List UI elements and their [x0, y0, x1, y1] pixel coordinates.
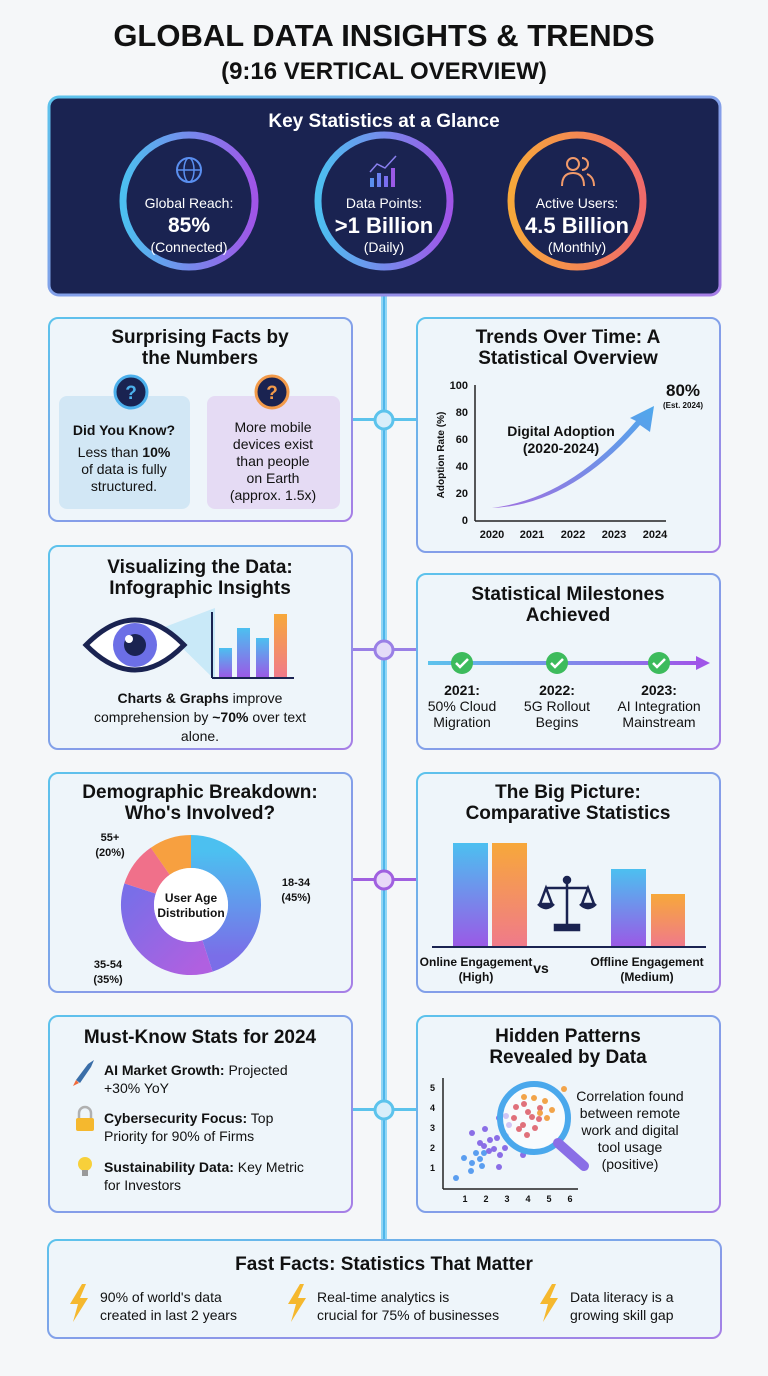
line chart: digital adoption: (Est. 2024): [663, 401, 703, 410]
fact 2: [288, 1284, 499, 1323]
scatter plot: 1: [462, 1194, 468, 1204]
stat: data points: (Daily): [364, 239, 404, 255]
panel: surprising facts: the Numbers: [142, 348, 258, 369]
line chart: digital adoption: 20: [456, 488, 468, 500]
panel: visualizing the data: Visualizing the Data:: [107, 557, 293, 578]
fact 3: [540, 1284, 674, 1323]
panel: trends over time: Statistical Overview: [478, 348, 658, 369]
panel: comparative statistics: Offline Engagement: [590, 955, 704, 969]
stat: active users: (Monthly): [548, 239, 606, 255]
panel: milestones: Achieved: [526, 605, 610, 626]
fact card: mobile devices: [207, 376, 340, 509]
panel: comparative statistics: The Big Picture:: [495, 782, 641, 803]
panel: surprising facts: [49, 318, 352, 521]
line chart: digital adoption: 0: [462, 515, 468, 527]
panel: hidden patterns: tool usage: [598, 1139, 663, 1155]
fact card: mobile devices: on Earth: [247, 470, 299, 486]
scatter plot: 3: [504, 1194, 510, 1204]
scatter plot: 5: [546, 1194, 552, 1204]
stat: global reach: (Connected): [150, 239, 228, 255]
panel: milestones: 2023:: [641, 682, 677, 698]
panel: key statistics: [49, 97, 720, 295]
panel: comparative statistics: Online Engagement: [420, 955, 532, 969]
item: cybersecurity: Priority for 90% of Firms: [104, 1128, 254, 1144]
panel: milestones: Begins: [536, 714, 578, 730]
panel: milestones: 2022:: [539, 682, 575, 698]
scatter plot: 4: [525, 1194, 531, 1204]
panel: hidden patterns: (positive): [602, 1156, 658, 1172]
panel: hidden patterns: Revealed by Data: [489, 1047, 647, 1068]
panel: milestones: 2021:: [444, 682, 480, 698]
fact card: did you know: structured.: [91, 478, 157, 494]
line chart: digital adoption: 80%: [666, 381, 700, 400]
panel: fast facts: [48, 1240, 721, 1338]
title: [113, 18, 655, 85]
line chart: digital adoption: 100: [450, 380, 468, 392]
stat: data points: Data Points:: [346, 195, 422, 211]
panel: comparative statistics: [417, 773, 720, 992]
panel: hidden patterns: Hidden Patterns: [495, 1026, 641, 1047]
panel: demographic breakdown: 35-54: [94, 959, 123, 971]
central timeline spine: [352, 290, 416, 1245]
panel: visualizing the data: Charts & Graphs improve: [118, 690, 283, 706]
line chart: digital adoption: Adoption Rate (%): [436, 412, 447, 498]
panel: visualizing the data: alone.: [181, 728, 219, 744]
scatter plot: 4: [430, 1103, 435, 1113]
line chart: digital adoption: 60: [456, 434, 468, 446]
fact card: mobile devices: (approx. 1.5x): [230, 487, 316, 503]
scatter plot: 1: [430, 1163, 435, 1173]
scatter plot: 3: [430, 1123, 435, 1133]
panel: visualizing the data: [49, 546, 352, 749]
stat: data points: [318, 135, 450, 267]
panel: demographic breakdown: (20%): [95, 847, 125, 859]
item: cybersecurity: [76, 1107, 274, 1144]
fact card: did you know: Did You Know?: [73, 422, 175, 438]
fact 2: Real-time analytics is: [317, 1289, 449, 1305]
panel: milestones: [417, 574, 720, 749]
line chart: digital adoption: 2023: [602, 529, 626, 541]
stat: data points: >1 Billion: [335, 213, 433, 238]
fact card: did you know: [59, 376, 190, 509]
panel: demographic breakdown: Who's Involved?: [125, 803, 275, 824]
line chart: digital adoption: 40: [456, 461, 468, 473]
panel: surprising facts: Surprising Facts by: [111, 327, 289, 348]
panel: hidden patterns: between remote: [580, 1105, 680, 1121]
fact card: did you know: Less than 10%: [78, 444, 171, 460]
bar chart: mini: [212, 612, 294, 678]
donut chart: user age: Distribution: [157, 906, 225, 920]
fact card: mobile devices: ?: [266, 383, 278, 404]
line chart: digital adoption: 2024: [643, 529, 668, 541]
scatter plot: 6: [567, 1194, 573, 1204]
line chart: digital adoption: (2020-2024): [523, 440, 599, 456]
panel: demographic breakdown: 18-34: [282, 877, 311, 889]
panel: comparative statistics: vs: [533, 960, 549, 976]
fact card: did you know: ?: [125, 383, 137, 404]
fact 2: crucial for 75% of businesses: [317, 1307, 499, 1323]
line chart: digital adoption: [436, 380, 703, 541]
panel: milestones: Mainstream: [622, 714, 696, 730]
item: sustainability: Sustainability Data: Key Metric: [104, 1159, 304, 1175]
panel: demographic breakdown: (45%): [281, 892, 311, 904]
stat: active users: 4.5 Billion: [525, 213, 629, 238]
panel: milestones: Migration: [433, 714, 491, 730]
panel: trends over time: Trends Over Time: A: [476, 327, 661, 348]
panel: milestones: 5G Rollout: [524, 698, 590, 714]
panel: comparative statistics: (Medium): [620, 970, 674, 984]
fact card: mobile devices: devices exist: [233, 436, 313, 452]
panel: hidden patterns: Correlation found: [576, 1088, 684, 1104]
panel: hidden patterns: [417, 1016, 720, 1212]
panel: comparative statistics: Comparative Statistics: [466, 803, 670, 824]
line chart: digital adoption: Digital Adoption: [507, 423, 615, 439]
panel: must-know stats: Must-Know Stats for 2024: [84, 1027, 317, 1048]
panel: demographic breakdown: 55+: [101, 832, 119, 844]
timeline arrow: [428, 652, 710, 674]
fact 3: Data literacy is a: [570, 1289, 674, 1305]
panel: milestones: AI Integration: [617, 698, 701, 714]
line chart: digital adoption: 80: [456, 407, 468, 419]
stat: active users: Active Users:: [536, 195, 618, 211]
item: sustainability: [78, 1157, 304, 1193]
panel: milestones: 50% Cloud: [428, 698, 496, 714]
fact 1: created in last 2 years: [100, 1307, 237, 1323]
panel: hidden patterns: work and digital: [580, 1122, 679, 1138]
panel: demographic breakdown: [49, 773, 352, 992]
bar chart: engagement: [432, 843, 706, 947]
panel: milestones: Statistical Milestones: [471, 584, 665, 605]
donut chart: user age: [137, 852, 245, 959]
panel: trends over time: [417, 318, 720, 552]
item: sustainability: for Investors: [104, 1177, 181, 1193]
donut chart: user age: User Age: [165, 891, 217, 905]
line chart: digital adoption: 2022: [561, 529, 585, 541]
fact 3: growing skill gap: [570, 1307, 674, 1323]
item: cybersecurity: Cybersecurity Focus: Top: [104, 1110, 274, 1126]
title: (9:16 VERTICAL OVERVIEW): [221, 58, 547, 85]
panel: demographic breakdown: (35%): [93, 974, 123, 986]
stat: active users: [511, 135, 643, 267]
icon: eye: [86, 608, 215, 680]
scatter plot: [430, 1078, 584, 1204]
scatter plot: 5: [430, 1083, 435, 1093]
stat: global reach: Global Reach:: [145, 195, 233, 211]
fact card: did you know: of data is fully: [81, 461, 167, 477]
stat: global reach: 85%: [168, 214, 210, 237]
heading: key statistics: Key Statistics at a Glance: [268, 111, 500, 132]
panel: demographic breakdown: Demographic Breakdown:: [82, 782, 318, 803]
scatter plot: 2: [483, 1194, 489, 1204]
line chart: digital adoption: 2021: [520, 529, 544, 541]
item: AI market: AI Market Growth: Projected: [104, 1062, 288, 1078]
title: GLOBAL DATA INSIGHTS & TRENDS: [113, 18, 655, 53]
stat: global reach: [123, 135, 255, 267]
scatter plot: 2: [430, 1143, 435, 1153]
item: AI market: +30% YoY: [104, 1080, 170, 1096]
icon: scale: [538, 876, 596, 930]
fact 1: 90% of world's data: [100, 1289, 222, 1305]
fact card: mobile devices: More mobile: [234, 419, 312, 435]
panel: visualizing the data: comprehension by ~70% over text: [94, 709, 306, 725]
line chart: digital adoption: 2020: [480, 529, 504, 541]
panel: visualizing the data: Infographic Insights: [109, 578, 291, 599]
fact card: mobile devices: than people: [236, 453, 310, 469]
panel: comparative statistics: (High): [459, 970, 493, 984]
panel: fast facts: Fast Facts: Statistics That Matter: [235, 1254, 533, 1275]
item: AI market: [73, 1060, 288, 1096]
panel: must-know stats: [49, 1016, 352, 1212]
fact 1: [70, 1284, 237, 1323]
